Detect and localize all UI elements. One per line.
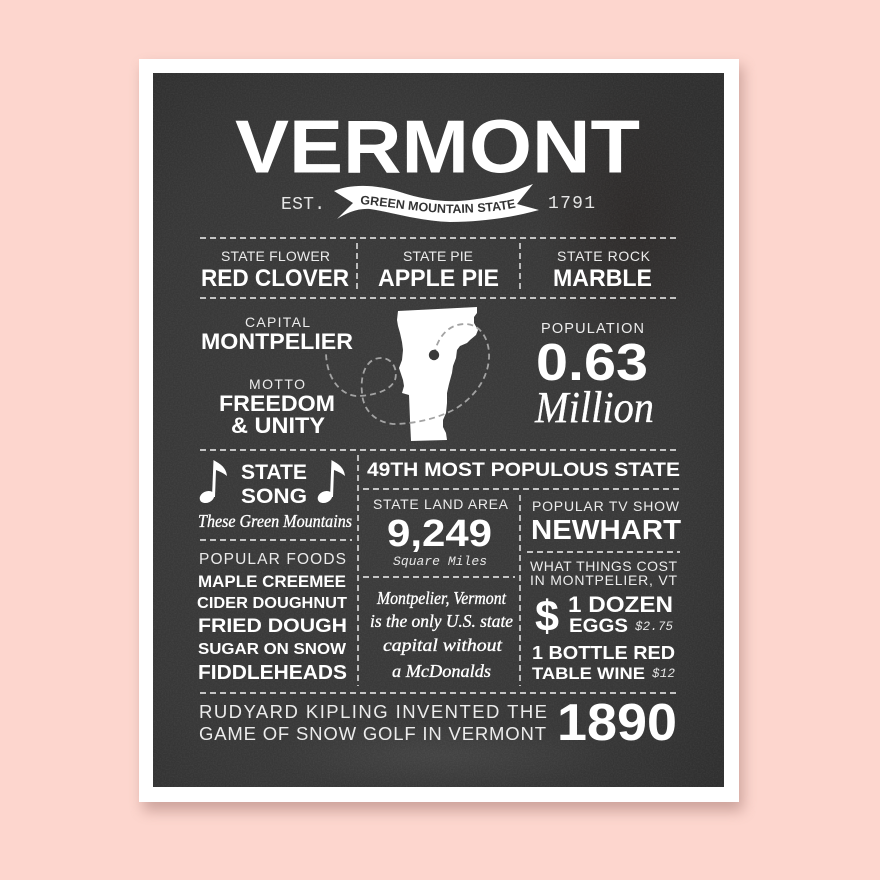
state rock: STATE ROCK bbox=[557, 248, 651, 264]
what things cost: $12 bbox=[652, 667, 675, 681]
state song: SONG bbox=[241, 485, 307, 508]
icon: dollar sign: $ bbox=[535, 592, 559, 641]
what things cost: $2.75 bbox=[635, 620, 673, 634]
state flower: STATE FLOWER bbox=[221, 248, 330, 264]
popular foods: SUGAR ON SNOW bbox=[198, 641, 347, 658]
white poster frame bbox=[139, 59, 739, 802]
state rock: MARBLE bbox=[553, 265, 652, 292]
what things cost: TABLE WINE bbox=[532, 664, 645, 683]
population: Million bbox=[534, 383, 654, 432]
popular tv show: POPULAR TV SHOW bbox=[532, 498, 680, 514]
banner: green mountain state bbox=[334, 184, 539, 222]
state pie: APPLE PIE bbox=[378, 265, 499, 292]
population: POPULATION bbox=[541, 321, 644, 337]
fun fact: mcdonalds: a McDonalds bbox=[392, 661, 491, 681]
land area: STATE LAND AREA bbox=[373, 496, 509, 512]
fun fact: mcdonalds: capital without bbox=[383, 635, 503, 655]
established line bbox=[281, 194, 595, 215]
motto bbox=[219, 376, 335, 438]
population: 0.63 bbox=[536, 334, 648, 392]
chalkboard panel bbox=[153, 73, 724, 790]
state rock bbox=[553, 248, 652, 292]
population bbox=[534, 321, 654, 432]
state pie: STATE PIE bbox=[403, 248, 473, 264]
established line: 1791 bbox=[548, 194, 595, 214]
capital: CAPITAL bbox=[245, 314, 310, 330]
what things cost: 1 BOTTLE RED bbox=[532, 642, 675, 663]
state song: STATE bbox=[241, 461, 307, 484]
motto: MOTTO bbox=[249, 376, 305, 392]
footer fact: snow golf: RUDYARD KIPLING INVENTED THE bbox=[199, 701, 547, 722]
popular tv show bbox=[531, 498, 681, 545]
fun fact: mcdonalds bbox=[370, 588, 513, 681]
popular foods bbox=[197, 551, 347, 684]
footer fact: snow golf bbox=[199, 694, 677, 752]
popular tv show: NEWHART bbox=[531, 514, 681, 545]
49th most populous: 49TH MOST POPULOUS STATE bbox=[367, 460, 680, 481]
what things cost: EGGS bbox=[569, 615, 628, 637]
capital bbox=[201, 314, 353, 354]
icon: right music note bbox=[316, 460, 345, 505]
popular foods: FRIED DOUGH bbox=[198, 615, 347, 637]
land area: 9,249 bbox=[387, 513, 492, 555]
what things cost bbox=[530, 558, 677, 683]
popular foods: POPULAR FOODS bbox=[199, 551, 346, 568]
what things cost: 1 DOZEN bbox=[568, 592, 673, 617]
popular foods: CIDER DOUGHNUT bbox=[197, 595, 347, 612]
capital: MONTPELIER bbox=[201, 329, 353, 354]
state song: These Green Mountains bbox=[198, 511, 352, 531]
panel shadow bbox=[143, 66, 743, 811]
fun fact: mcdonalds: Montpelier, Vermont bbox=[376, 588, 507, 608]
state flower: RED CLOVER bbox=[201, 265, 349, 292]
popular foods: FIDDLEHEADS bbox=[198, 662, 347, 684]
land area: Square Miles bbox=[393, 554, 487, 569]
motto: FREEDOM bbox=[219, 391, 335, 416]
fun fact: mcdonalds: is the only U.S. state bbox=[370, 611, 513, 631]
motto: & UNITY bbox=[231, 413, 325, 438]
established line: EST. bbox=[281, 195, 325, 215]
footer fact: snow golf: GAME OF SNOW GOLF IN VERMONT bbox=[199, 723, 546, 744]
banner: green mountain state: GREEN MOUNTAIN STATE bbox=[360, 196, 516, 214]
state pie bbox=[378, 248, 499, 292]
state song bbox=[198, 460, 352, 531]
what things cost: IN MONTPELIER, VT bbox=[530, 572, 677, 588]
land area bbox=[373, 496, 509, 569]
title: VERMONT bbox=[235, 104, 640, 188]
map: vermont with route bbox=[326, 307, 489, 441]
state flower bbox=[201, 248, 349, 292]
footer fact: snow golf: 1890 bbox=[557, 694, 677, 752]
popular foods: MAPLE CREEMEE bbox=[198, 572, 346, 591]
icon: left music note bbox=[198, 460, 227, 505]
what things cost: WHAT THINGS COST bbox=[530, 558, 677, 574]
